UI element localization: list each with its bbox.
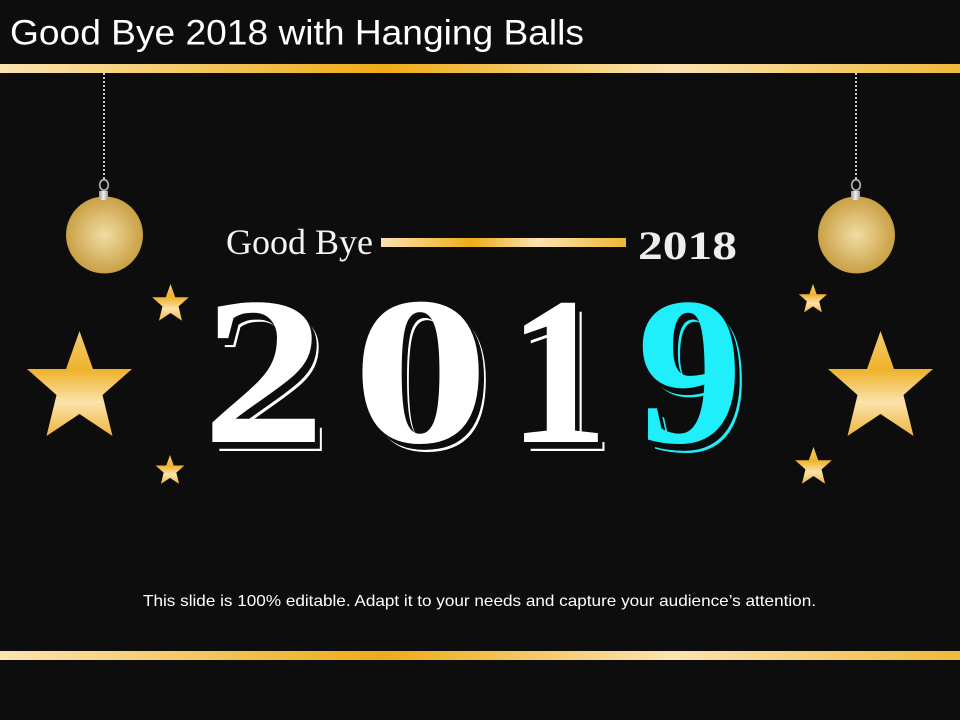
digit 1: 1 — [512, 261, 612, 495]
top gold bar — [0, 64, 960, 73]
title: Good Bye 2018 with Hanging Balls — [10, 12, 584, 52]
digit 0: 0 — [352, 254, 489, 488]
digit 9 cyan: 9 — [644, 263, 750, 497]
star small left lower — [156, 455, 184, 484]
caption: This slide is 100% editable. Adapt it to your needs and capture your audience’s attention. — [143, 593, 816, 610]
star large left — [27, 331, 132, 436]
large 2019 — [202, 254, 750, 497]
star small right upper — [799, 284, 827, 312]
hanging ball left — [66, 73, 143, 274]
digit 9 cyan: 9 — [637, 254, 742, 488]
center gold bar — [381, 238, 626, 247]
digit 0: 0 — [359, 262, 496, 496]
good bye label: Good Bye — [226, 222, 373, 262]
digit 9 cyan: 9 — [642, 260, 747, 494]
digit 2: 2 — [209, 263, 332, 497]
digit 1: 1 — [508, 254, 608, 488]
star small right lower — [795, 447, 832, 484]
hanging ball right — [818, 73, 895, 274]
digit 2: 2 — [207, 260, 330, 494]
digit 1: 1 — [515, 263, 615, 497]
digit 2: 2 — [202, 254, 325, 488]
digit 0: 0 — [357, 260, 494, 493]
bottom gold bar — [0, 651, 960, 660]
small 2018: 2018 — [638, 223, 737, 268]
star small left upper — [152, 284, 189, 321]
star large right — [828, 331, 933, 436]
